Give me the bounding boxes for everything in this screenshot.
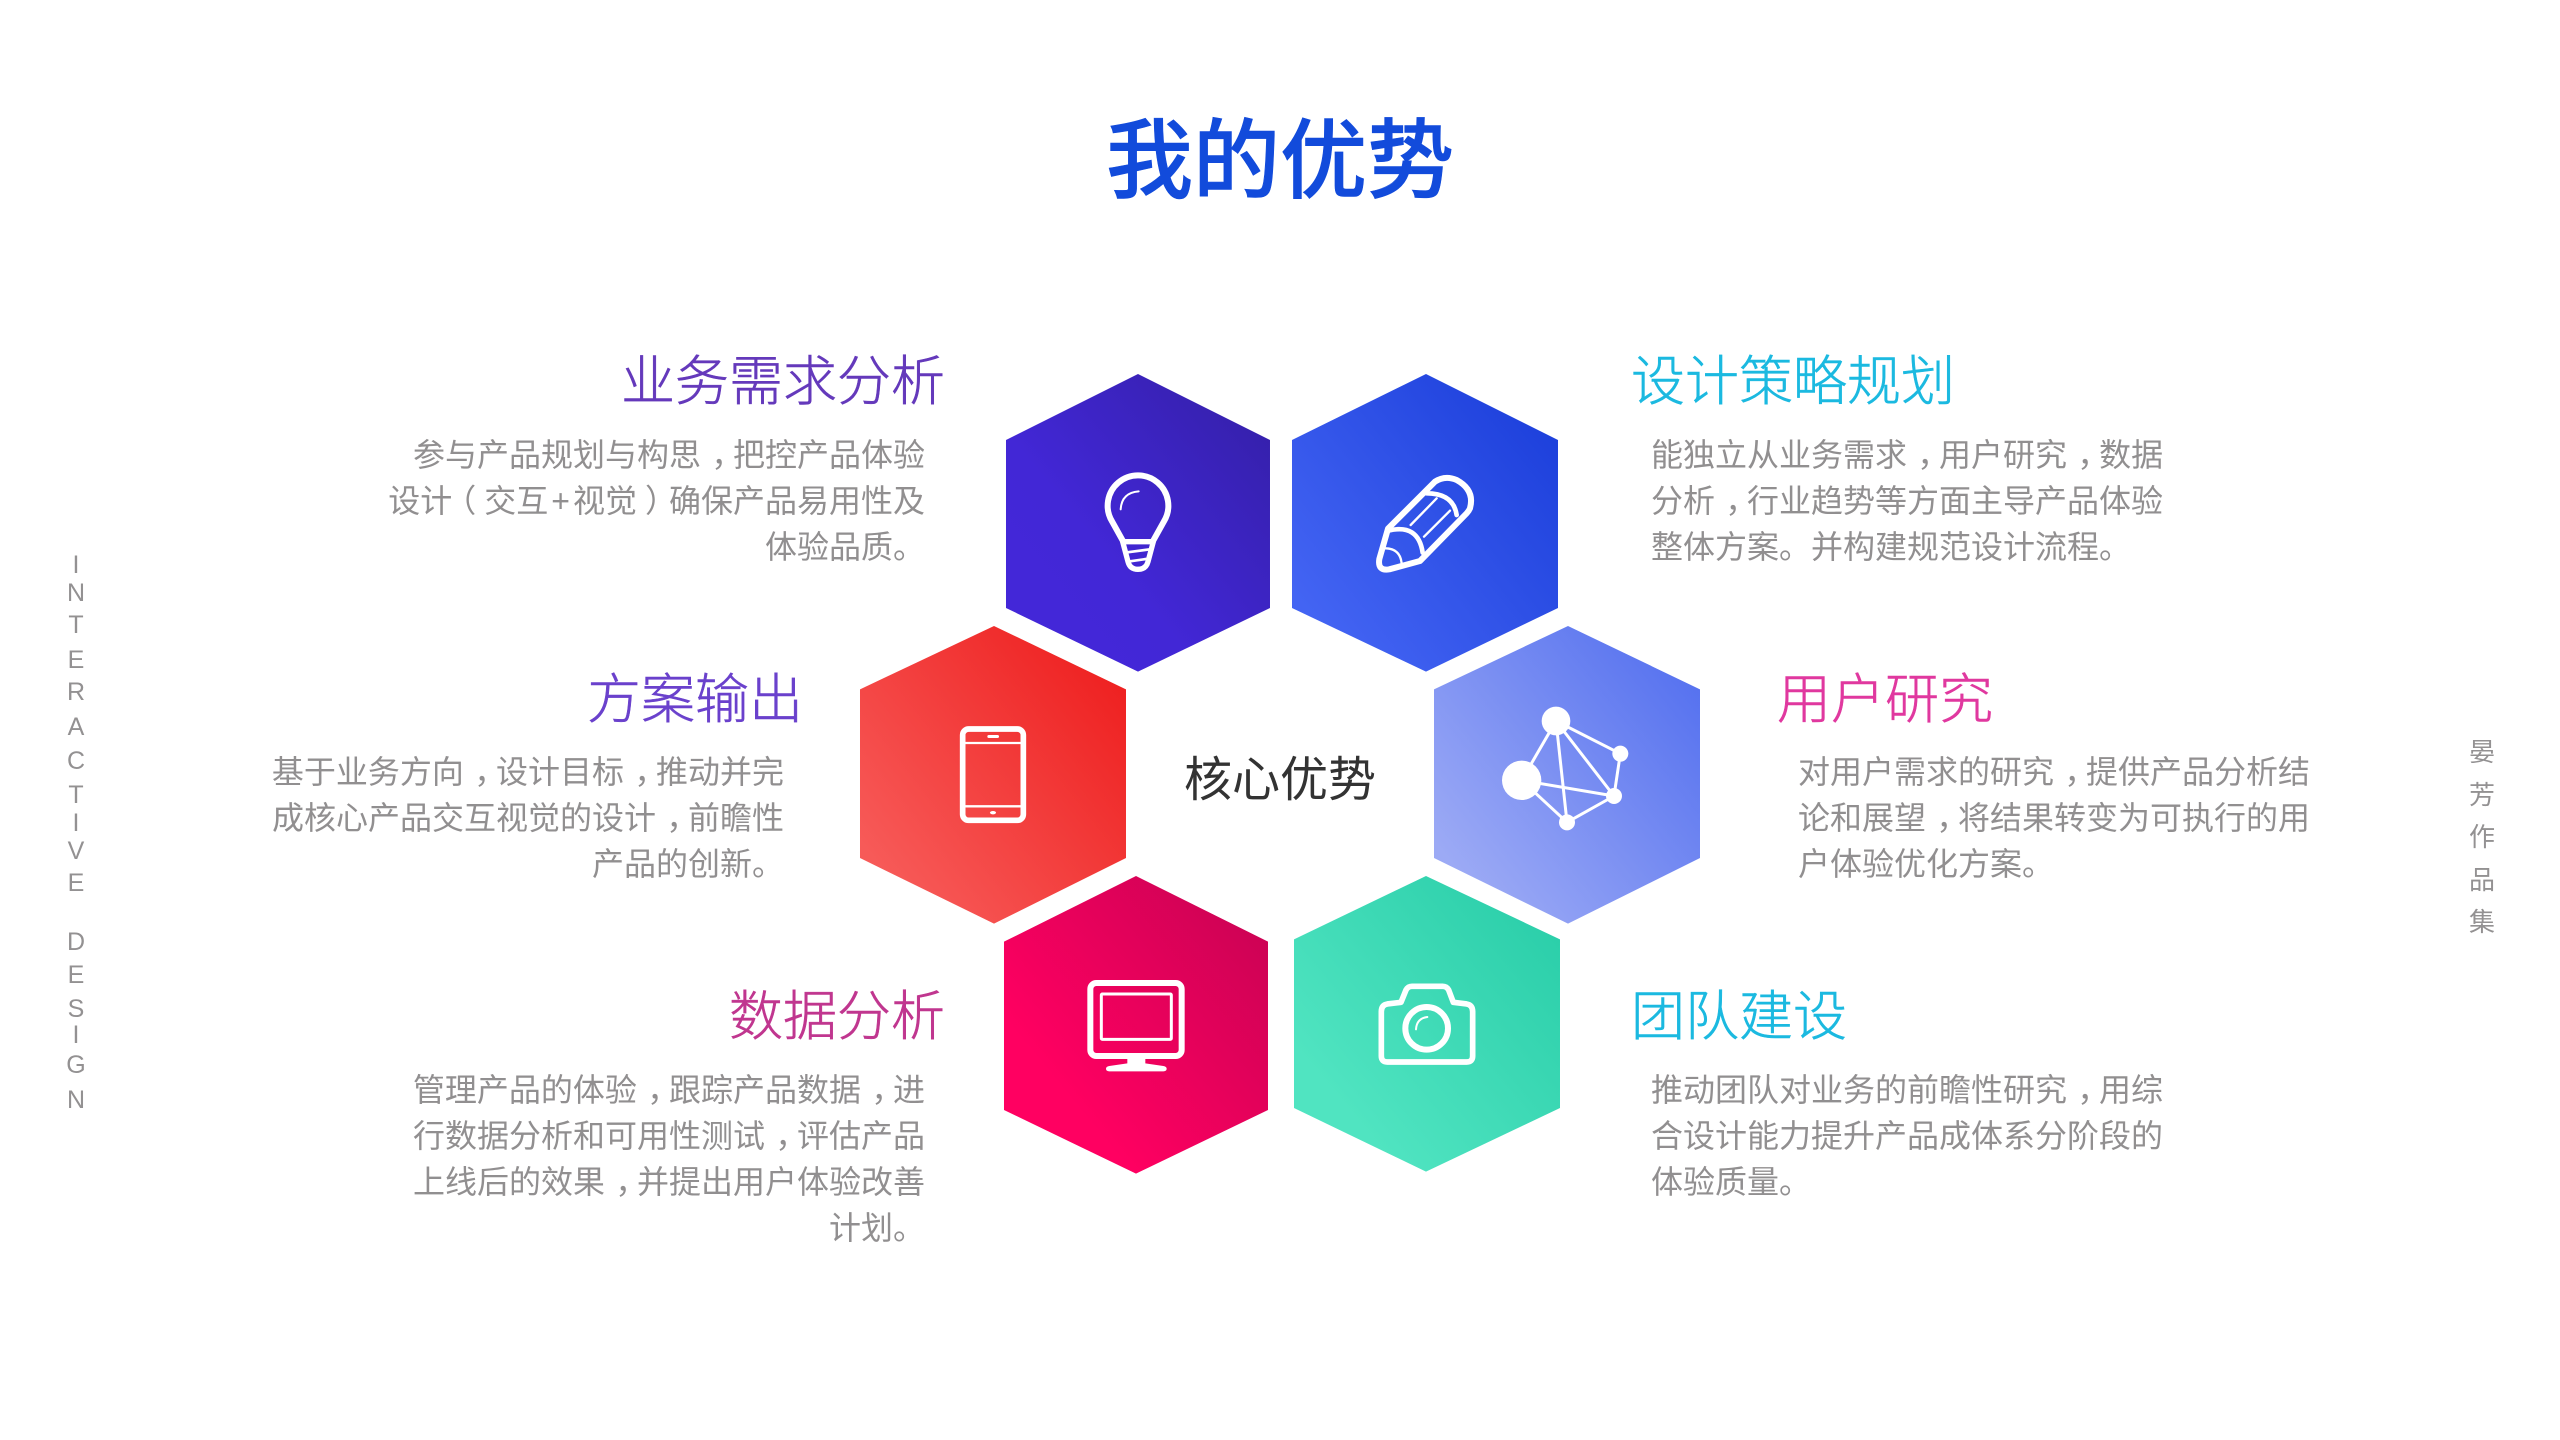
hexagon: user research, network [1434, 626, 1700, 924]
hexagon: design strategy, pencil [1292, 374, 1558, 672]
heading: 团队建设 [1631, 987, 1847, 1047]
vertical label: portfolio name: 品 [2469, 865, 2495, 895]
icon: light bulb [1108, 475, 1168, 569]
hexagon: data analysis, monitor [1004, 876, 1268, 1174]
vertical label: portfolio name: 作 [2469, 822, 2495, 852]
vertical label: interactive design [66, 551, 86, 1114]
icon: tablet [963, 729, 1023, 820]
text block: 计划。 [829, 1210, 925, 1246]
vertical label: interactive design: G [66, 1051, 86, 1079]
text block [1651, 1072, 2163, 1200]
text block: 论和展望 ，将结果转变为可执行的用 [1798, 800, 2310, 836]
text block [1798, 754, 2310, 882]
text block: 体验质量。 [1651, 1164, 1811, 1200]
vertical label: portfolio name: 晏 [2469, 737, 2495, 767]
panel: design strategy planning [1631, 352, 2163, 565]
panel: solution output [272, 670, 803, 882]
text block: 对用户需求的研究 ，提供产品分析结 [1798, 754, 2310, 790]
vertical label: interactive design: N [67, 579, 85, 607]
text block [413, 1072, 925, 1246]
text block: 户体验优化方案。 [1798, 846, 2054, 882]
icon: pencil [1379, 478, 1471, 570]
vertical label: interactive design: R [67, 678, 85, 706]
text block: 设计（交互+视觉）确保产品易用性及 [388, 483, 925, 519]
icon: network graph [1502, 707, 1628, 830]
text block: 基于业务方向 ，设计目标 ，推动并完 [272, 754, 784, 790]
vertical label: interactive design: T [68, 611, 84, 639]
vertical label: interactive design: T [68, 781, 84, 809]
text block [1651, 437, 2163, 565]
vertical label: interactive design: N [67, 1086, 85, 1114]
icon: monitor [1090, 983, 1182, 1071]
vertical label: portfolio name: 集 [2469, 907, 2495, 937]
text block: 上线后的效果 ，并提出用户体验改善 [413, 1164, 925, 1200]
vertical label: interactive design: D [67, 928, 85, 956]
hexagon: solution output, tablet [860, 626, 1126, 924]
vertical label: portfolio name: 芳 [2469, 780, 2495, 810]
text block: 管理产品的体验 ，跟踪产品数据 ，进 [413, 1072, 925, 1108]
vertical label: interactive design: E [68, 646, 84, 674]
vertical label: portfolio name [2469, 737, 2495, 937]
vertical label: interactive design: I [73, 551, 79, 579]
vertical label: interactive design: E [68, 869, 84, 897]
heading: 数据分析 [729, 987, 945, 1047]
text block: 产品的创新。 [592, 846, 784, 882]
vertical label: interactive design: E [68, 961, 84, 989]
vertical label: interactive design: C [67, 747, 85, 775]
vertical label: interactive design: A [68, 713, 84, 741]
text block [388, 437, 925, 565]
heading: 业务需求分析 [621, 352, 945, 412]
text block: 合设计能力提升产品成体系分阶段的 [1651, 1118, 2163, 1154]
panel: business needs analysis [388, 352, 945, 565]
heading: 方案输出 [587, 670, 803, 730]
center label: 核心优势 [1184, 754, 1376, 807]
text block: 成核心产品交互视觉的设计 ，前瞻性 [272, 800, 784, 836]
text block [272, 754, 784, 882]
text block: 体验品质。 [765, 529, 925, 565]
text block: 参与产品规划与构思 ，把控产品体验 [413, 437, 925, 473]
text block: 能独立从业务需求 ，用户研究 ，数据 [1651, 437, 2163, 473]
heading: 设计策略规划 [1631, 352, 1955, 412]
text block: 分析 ，行业趋势等方面主导产品体验 [1651, 483, 2163, 519]
vertical label: interactive design: S [68, 995, 84, 1023]
title: 我的优势 [1106, 113, 1454, 210]
icon: camera [1381, 986, 1473, 1062]
panel: data analysis [413, 987, 945, 1246]
text block: 行数据分析和可用性测试 ，评估产品 [413, 1118, 925, 1154]
panel: user research [1777, 670, 2310, 882]
hexagon: team building, camera [1294, 876, 1560, 1172]
vertical label: interactive design: V [68, 837, 84, 865]
text block: 推动团队对业务的前瞻性研究 ，用综 [1651, 1072, 2163, 1108]
panel: team building [1631, 987, 2163, 1200]
vertical label: interactive design: I [73, 809, 79, 837]
hexagon: business needs, light bulb [1006, 374, 1270, 672]
heading: 用户研究 [1777, 670, 1993, 730]
text block: 整体方案。并构建规范设计流程。 [1651, 529, 2131, 565]
vertical label: interactive design: I [73, 1021, 79, 1049]
